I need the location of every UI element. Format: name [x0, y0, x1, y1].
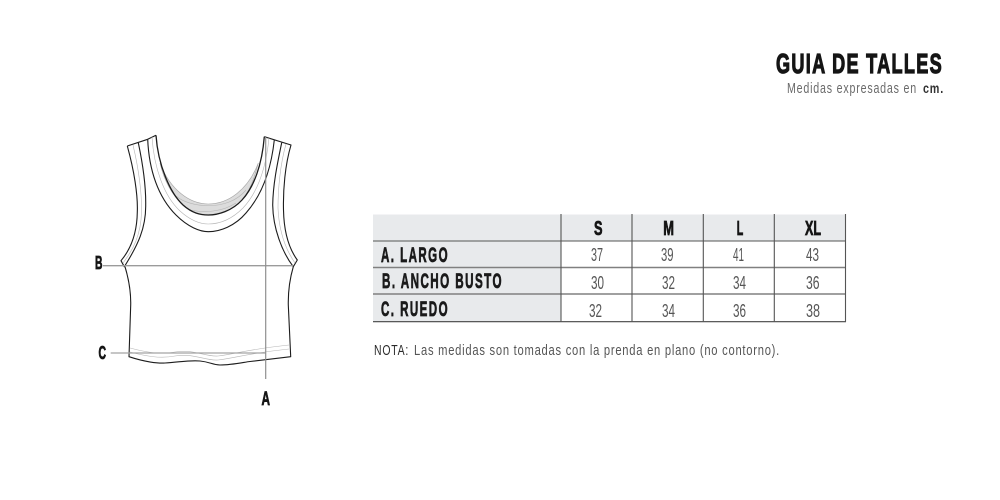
size table: [373, 214, 846, 322]
label A: A: [262, 389, 270, 410]
row: A. Largo: A. LARGO: [381, 244, 449, 267]
row: C. Ruedo: [381, 298, 820, 321]
label B: B: [95, 253, 102, 273]
footnote: [374, 342, 780, 359]
row: B. Ancho Busto: 34: [733, 272, 746, 293]
row: C. Ruedo: 34: [662, 300, 675, 321]
neck band inner edge: [156, 135, 264, 215]
table shading: [373, 214, 846, 322]
row: B. Ancho Busto: 32: [662, 272, 675, 293]
footnote: Las medidas son tomadas con la prenda en plano (no contorno).: [414, 342, 780, 359]
row: C. Ruedo: C. RUEDO: [381, 298, 449, 321]
footnote: NOTA:: [374, 342, 409, 359]
measure line C: hem: [111, 352, 266, 354]
left armhole band: [121, 139, 148, 267]
row: B. Ancho Busto: [382, 270, 820, 293]
column dividers: [561, 214, 846, 322]
header sizes: S: [594, 218, 602, 240]
band stitching: [123, 137, 295, 263]
row divider 2: [373, 293, 846, 295]
neck band outer edge: [148, 135, 274, 232]
row: A. Largo: [381, 244, 819, 267]
header sizes: M: [663, 218, 674, 240]
row: C. Ruedo: 32: [589, 300, 602, 321]
row: A. Largo: 41: [733, 244, 744, 265]
back neck fold lines: [176, 190, 246, 212]
row: A. Largo: 43: [806, 244, 819, 265]
table grid: [373, 240, 846, 242]
header sizes: XL: [805, 218, 821, 240]
label C: C: [98, 343, 106, 363]
row: C. Ruedo: 38: [806, 300, 820, 321]
subtitle: Medidas expresadas en: [787, 81, 917, 97]
row: C. Ruedo: 36: [733, 300, 746, 321]
hem stitching: [130, 345, 289, 360]
bottom border: [373, 321, 846, 323]
right armhole band: [264, 137, 297, 267]
row: B. Ancho Busto: 30: [591, 272, 604, 293]
row: B. Ancho Busto: B. ANCHO BUSTO: [382, 270, 503, 293]
subtitle: cm.: [923, 81, 944, 96]
garment: cropped tank top flat sketch: [121, 135, 297, 365]
measure line B: bust width: [103, 265, 293, 267]
body outline: [125, 267, 293, 365]
header sizes: [594, 218, 821, 240]
row: B. Ancho Busto: 36: [806, 272, 820, 293]
row: A. Largo: 37: [591, 244, 603, 265]
back neckline grey area: [160, 163, 258, 215]
measure line A: length: [265, 137, 267, 379]
row divider 1: [373, 266, 846, 268]
header sizes: L: [737, 218, 743, 240]
row: A. Largo: 39: [661, 244, 674, 265]
